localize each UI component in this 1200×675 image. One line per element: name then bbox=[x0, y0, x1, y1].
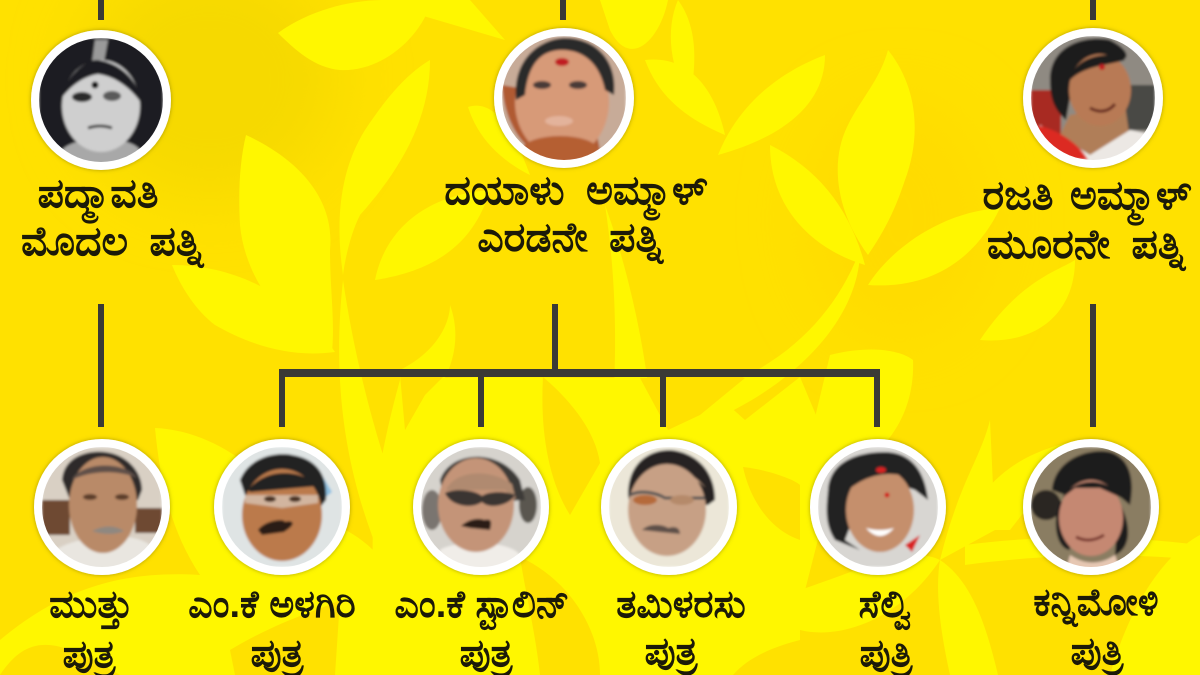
label: M.K. Stalin, son: ಎಂ.ಕೆ ಸ್ಟಾಲಿನ್ bbox=[395, 584, 569, 631]
label: Padmavathi, first wife bbox=[21, 170, 205, 268]
label: M.K. Stalin, son: ಪುತ್ರ bbox=[460, 633, 514, 675]
label: M.K. Alagiri, son: ಪುತ್ರ bbox=[251, 633, 305, 675]
label: Selvi, daughter: ಪುತ್ರಿ bbox=[860, 633, 914, 675]
label: Kanimozhi, daughter bbox=[1033, 582, 1159, 675]
label: Padmavathi, first wife: ಪದ್ಮಾವತಿ bbox=[38, 170, 158, 223]
label: Kanimozhi, daughter: ಪುತ್ರಿ bbox=[1071, 631, 1125, 675]
label: Muthu, son: ಪುತ್ರ bbox=[63, 634, 117, 675]
label: Dayalu Ammal, second wife bbox=[444, 167, 708, 264]
dark shapes over bright field bbox=[230, 375, 800, 675]
label: Tamilarasu, son: ಪುತ್ರ bbox=[645, 631, 699, 675]
center stem bbox=[605, 205, 652, 420]
label: Rajathi Ammal, third wife: ಮೂರನೇ ಪತ್ನಿ bbox=[987, 221, 1187, 271]
label: M.K. Alagiri, son: ಎಂ.ಕೆ ಅಳಗಿರಿ bbox=[188, 584, 356, 626]
portrait: Muthu bbox=[34, 439, 170, 575]
label: Muthu, son bbox=[49, 584, 133, 675]
portrait: Rajathi Ammal bbox=[1023, 28, 1163, 168]
stem left bbox=[339, 280, 480, 675]
label: Muthu, son: ಮುತ್ತು bbox=[49, 584, 133, 629]
lower bright field bbox=[373, 377, 837, 675]
label: M.K. Stalin, son bbox=[395, 584, 569, 675]
portrait: Tamilarasu bbox=[601, 439, 737, 575]
label: Tamilarasu, son bbox=[616, 584, 746, 675]
label: Selvi, daughter: ಸೆಲ್ವಿ bbox=[859, 584, 911, 630]
portrait: Selvi bbox=[810, 439, 946, 575]
portrait: M.K. Alagiri bbox=[214, 439, 350, 575]
portrait: Kanimozhi bbox=[1023, 439, 1159, 575]
label: Padmavathi, first wife: ಮೊದಲ ಪತ್ನಿ bbox=[21, 218, 205, 268]
label: Selvi, daughter bbox=[859, 584, 914, 675]
portrait: Dayalu Ammal bbox=[494, 28, 634, 168]
label: Rajathi Ammal, third wife bbox=[983, 172, 1191, 271]
portrait: Padmavathi bbox=[31, 30, 171, 170]
label: M.K. Alagiri, son bbox=[188, 584, 356, 675]
curved right stem bbox=[640, 250, 860, 440]
portrait: M.K. Stalin bbox=[413, 439, 549, 575]
connector lines bbox=[98, 0, 1096, 427]
label: Rajathi Ammal, third wife: ರಜತಿ ಅಮ್ಮಾಳ್ bbox=[983, 172, 1191, 225]
label: Tamilarasu, son: ತಮಿಳರಸು bbox=[616, 584, 746, 626]
label: Kanimozhi, daughter: ಕನ್ನಿಮೋಳಿ bbox=[1033, 582, 1159, 627]
label: Dayalu Ammal, second wife: ದಯಾಳು ಅಮ್ಮಾಳ್ bbox=[444, 167, 708, 220]
label: Dayalu Ammal, second wife: ಎರಡನೇ ಪತ್ನಿ bbox=[477, 214, 665, 264]
